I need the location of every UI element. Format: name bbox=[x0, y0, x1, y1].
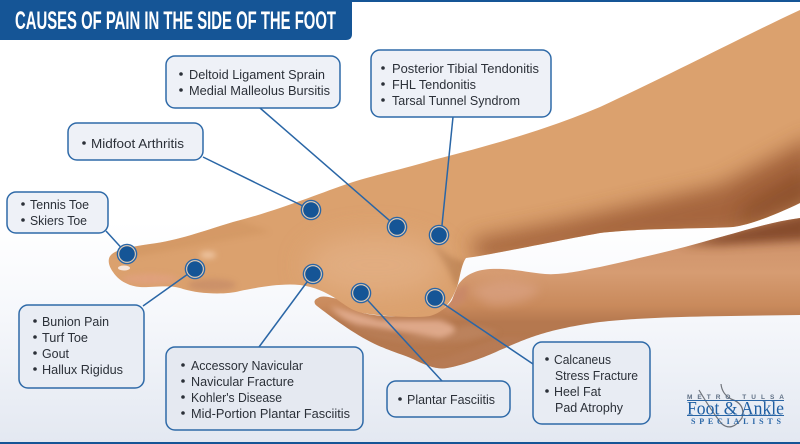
forearm and supporting hand bbox=[314, 218, 800, 368]
bottom rule bbox=[0, 442, 800, 444]
logo: SPECIALISTS bbox=[691, 417, 782, 426]
callout: calcaneus: Calcaneus bbox=[554, 352, 611, 367]
callout: posterior tibial: FHL Tendonitis bbox=[392, 77, 476, 92]
callout: midfoot: Midfoot Arthritis bbox=[91, 136, 185, 151]
callout: tennis toe bbox=[7, 192, 127, 254]
title banner bbox=[0, 0, 352, 40]
callout: posterior tibial: Posterior Tibial Tendonitis bbox=[392, 61, 539, 76]
callout: accessory navicular: Accessory Navicular bbox=[191, 358, 304, 373]
callout: tennis toe: Skiers Toe bbox=[30, 213, 87, 228]
logo: Foot & Ankle bbox=[687, 398, 784, 420]
callout: accessory navicular: Mid-Portion Plantar Fasciitis bbox=[191, 406, 350, 421]
callout: bunion: Hallux Rigidus bbox=[42, 362, 123, 377]
callout: deltoid: Deltoid Ligament Sprain bbox=[189, 67, 325, 82]
callout: bunion: Turf Toe bbox=[42, 330, 88, 345]
title text: CAUSES OF PAIN IN THE SIDE OF THE FOOT bbox=[15, 7, 336, 35]
callout: posterior tibial: Tarsal Tunnel Syndrom bbox=[392, 93, 520, 108]
callout: deltoid bbox=[166, 56, 397, 227]
callout: midfoot bbox=[68, 123, 311, 210]
top rule bbox=[0, 0, 800, 2]
callout: calcaneus: Pad Atrophy bbox=[555, 400, 623, 415]
callout: plantar fasciitis: Plantar Fasciitis bbox=[407, 392, 495, 407]
callout: bunion: Gout bbox=[42, 346, 69, 361]
callout: tennis toe: Tennis Toe bbox=[30, 197, 89, 212]
callout: bunion bbox=[19, 269, 195, 388]
callout: deltoid: Medial Malleolus Bursitis bbox=[189, 83, 330, 98]
callout: calcaneus: Heel Fat bbox=[554, 384, 601, 399]
callout: accessory navicular bbox=[166, 274, 363, 430]
callout: accessory navicular: Navicular Fracture bbox=[191, 374, 294, 389]
logo: METRO TULSA bbox=[687, 394, 784, 401]
leg and foot bbox=[100, 0, 800, 330]
callout: calcaneus: Stress Fracture bbox=[555, 368, 638, 383]
callout: accessory navicular: Kohler's Disease bbox=[191, 390, 282, 405]
callout: bunion: Bunion Pain bbox=[42, 314, 109, 329]
logo bbox=[687, 384, 784, 427]
callout: plantar fasciitis bbox=[361, 293, 510, 417]
callout: calcaneus bbox=[435, 298, 650, 424]
callout: posterior tibial bbox=[371, 50, 551, 235]
marker dots bbox=[117, 200, 449, 308]
